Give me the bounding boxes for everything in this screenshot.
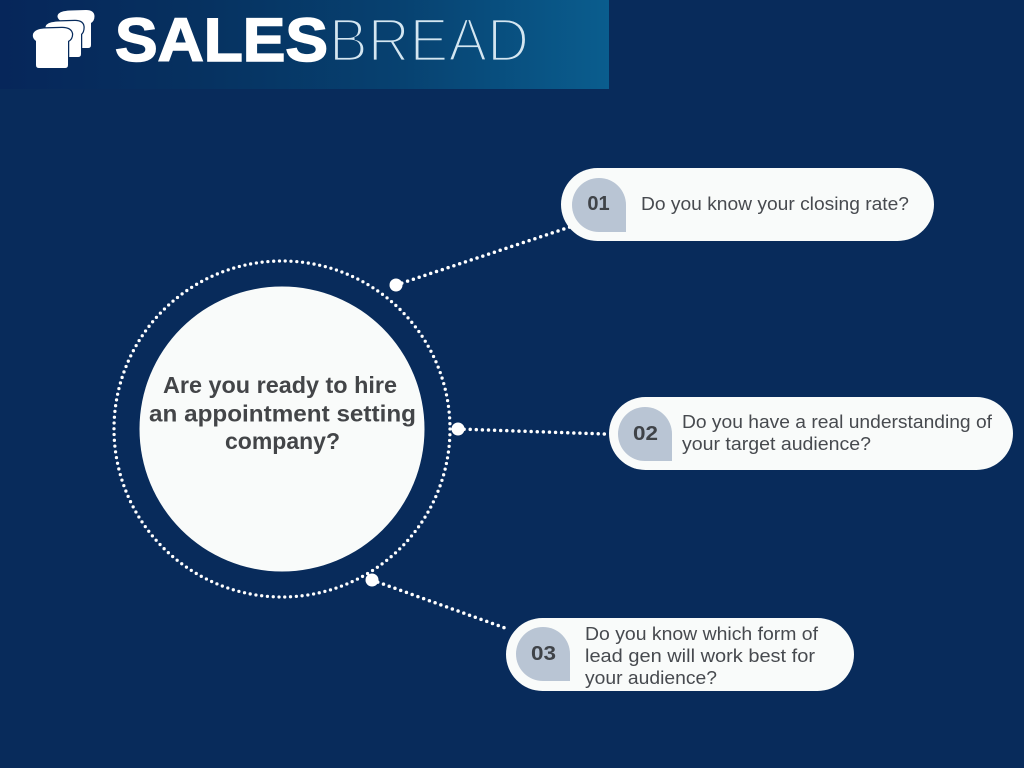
connector node 3: [366, 574, 378, 586]
dotted connector 3: [372, 580, 505, 628]
dotted connector 1: [396, 227, 570, 285]
logo wordmark: SALES: [115, 6, 328, 74]
question text 03: lead gen will work best for: [585, 646, 815, 666]
question text 03: your audience?: [585, 668, 717, 688]
connector node 1: [390, 278, 402, 292]
badge 03: [516, 627, 570, 681]
badge 02: [618, 407, 672, 461]
question text 03: Do you know which form of: [585, 624, 819, 644]
question text 02: your target audience?: [682, 434, 871, 454]
heading: an appointment setting: [149, 400, 416, 426]
badge 02: 02: [633, 423, 658, 445]
heading: Are you ready to hire: [163, 372, 397, 398]
panel: question 03: [506, 618, 854, 691]
logo wordmark: BREAD: [329, 6, 529, 74]
logo wordmark: [115, 6, 529, 74]
badge 01: [572, 178, 626, 232]
heading: company?: [225, 428, 340, 454]
central circle with heading: [140, 286, 424, 572]
dotted ring: [114, 261, 450, 597]
icon: bread slices: [33, 10, 94, 68]
question text 01: Do you know your closing rate?: [641, 194, 909, 214]
dotted connector 2: [458, 429, 605, 434]
badge 03: 03: [531, 643, 556, 665]
header banner with logo: [0, 0, 609, 89]
panel: question 01: [561, 168, 934, 241]
connector node 2: [452, 422, 464, 436]
question text 02: Do you have a real understanding of: [682, 412, 993, 432]
badge 01: 01: [587, 193, 610, 215]
panel: question 02: [609, 397, 1013, 470]
